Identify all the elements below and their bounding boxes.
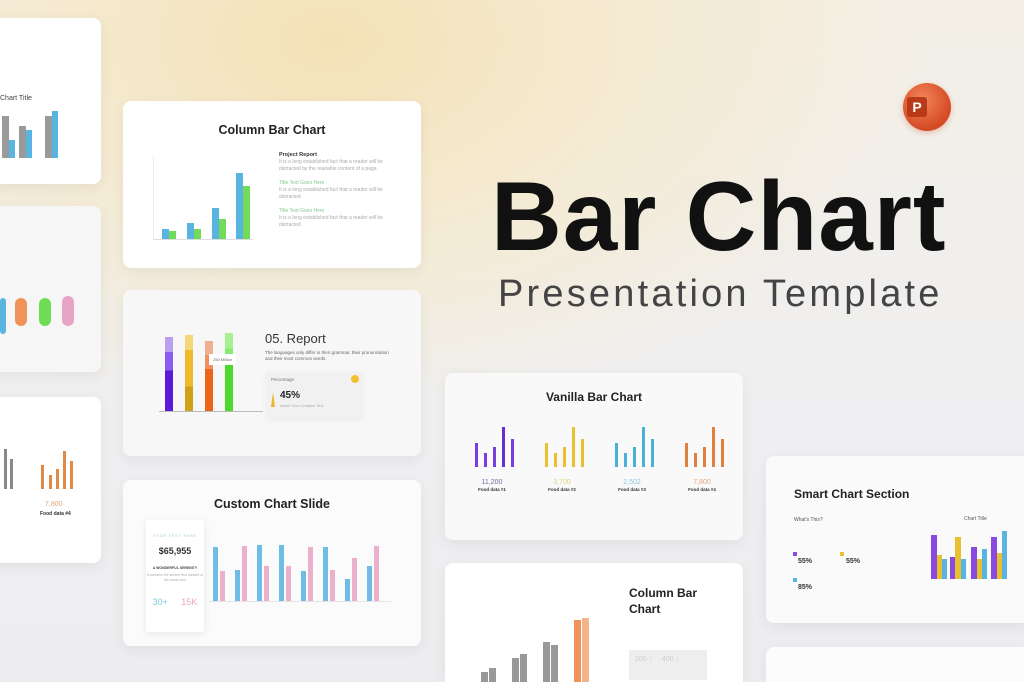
text: project report: Project Report xyxy=(279,152,317,158)
heading: 05. Report xyxy=(265,331,326,346)
panel: bottom right partial xyxy=(766,647,1024,682)
chart title: Chart Title xyxy=(0,95,32,102)
mini charts xyxy=(475,427,724,467)
heading: Smart Chart Section xyxy=(794,487,909,501)
bar chart xyxy=(481,618,589,682)
grouped bar chart xyxy=(209,530,391,602)
gray bars xyxy=(4,449,13,489)
value: 7,800 xyxy=(45,501,63,508)
heading xyxy=(629,586,697,616)
text: project report xyxy=(279,152,383,228)
stacked bars: 250 Million xyxy=(213,357,232,362)
values and labels: 7,800 xyxy=(693,479,711,486)
values and labels: Food data #3 xyxy=(618,487,646,492)
percentage box: Percentage xyxy=(271,377,294,382)
stat card: 15K xyxy=(181,597,197,607)
values and labels: 3,700 xyxy=(553,479,571,486)
values and labels: Food data #4 xyxy=(688,487,716,492)
description: The languages only differ in their grammar, their pronunciation and their most common words. xyxy=(265,350,389,361)
stat card: 30+ xyxy=(153,597,168,607)
heading: Column Bar xyxy=(629,586,697,600)
stat box xyxy=(629,650,707,680)
orange bars xyxy=(41,451,73,489)
stats: What's This? xyxy=(794,517,823,523)
heading: Column Bar Chart xyxy=(219,123,325,137)
panel: 05 report xyxy=(123,290,421,456)
panel: left top partial 3d chart xyxy=(0,18,101,184)
text: project report: It is a long established fact that a reader will be distracted by the readable content of a page. xyxy=(279,159,383,172)
panel: column bar chart 2 xyxy=(445,563,743,682)
title: Bar Chart xyxy=(491,161,947,271)
values and labels: Food data #1 xyxy=(478,487,506,492)
stat card: It contains the serene text content of the same soul xyxy=(147,573,203,582)
panel: smart chart section: 55% xyxy=(846,558,860,565)
text: project report: Title Text Goes Here xyxy=(279,180,324,186)
heading: Vanilla Bar Chart xyxy=(546,390,642,404)
values and labels: 11,200 xyxy=(482,479,502,486)
percentage box xyxy=(266,372,363,418)
panel: smart chart section xyxy=(766,456,1024,623)
values and labels xyxy=(478,479,716,492)
3d bars xyxy=(2,111,58,158)
heading: Chart xyxy=(629,602,660,616)
percentage box: 45% xyxy=(280,390,300,401)
panel: smart chart section: 85% xyxy=(798,584,812,591)
panel: column bar chart xyxy=(123,101,421,268)
capsules xyxy=(0,298,6,334)
values and labels: 2,502 xyxy=(623,479,641,486)
panel: vanilla bar chart xyxy=(445,373,743,540)
chart xyxy=(153,156,253,240)
stat card: A WONDERFUL SERENITY xyxy=(153,566,197,570)
panel: custom chart slide xyxy=(123,480,421,646)
stat card: YOUR TEXT HERE xyxy=(153,534,197,538)
text: project report: It is a long established fact that a reader will be distracted xyxy=(279,215,383,228)
stat card: $65,955 xyxy=(159,546,191,556)
panel: left middle partial capsule chart xyxy=(0,206,101,372)
stacked bars xyxy=(159,332,263,412)
text: project report: Title Text Goes Here xyxy=(279,208,324,214)
stat card xyxy=(146,520,204,632)
panel: left bottom partial food data xyxy=(0,397,101,563)
percentage box: Insert Your Creative Text xyxy=(280,403,324,408)
icon: powerpoint xyxy=(903,83,951,131)
values and labels: Food data #2 xyxy=(548,487,576,492)
panel: smart chart section: 55% xyxy=(798,558,812,565)
text: project report: It is a long established fact that a reader will be distracted xyxy=(279,187,383,200)
subtitle: Presentation Template xyxy=(498,273,943,315)
chart: Chart Title xyxy=(964,516,987,522)
heading: Custom Chart Slide xyxy=(214,497,330,511)
label: Food data #4 xyxy=(40,511,71,517)
stat box: 200 ↑ 400 ↑ xyxy=(635,656,679,663)
icon: powerpoint: P xyxy=(912,99,922,115)
